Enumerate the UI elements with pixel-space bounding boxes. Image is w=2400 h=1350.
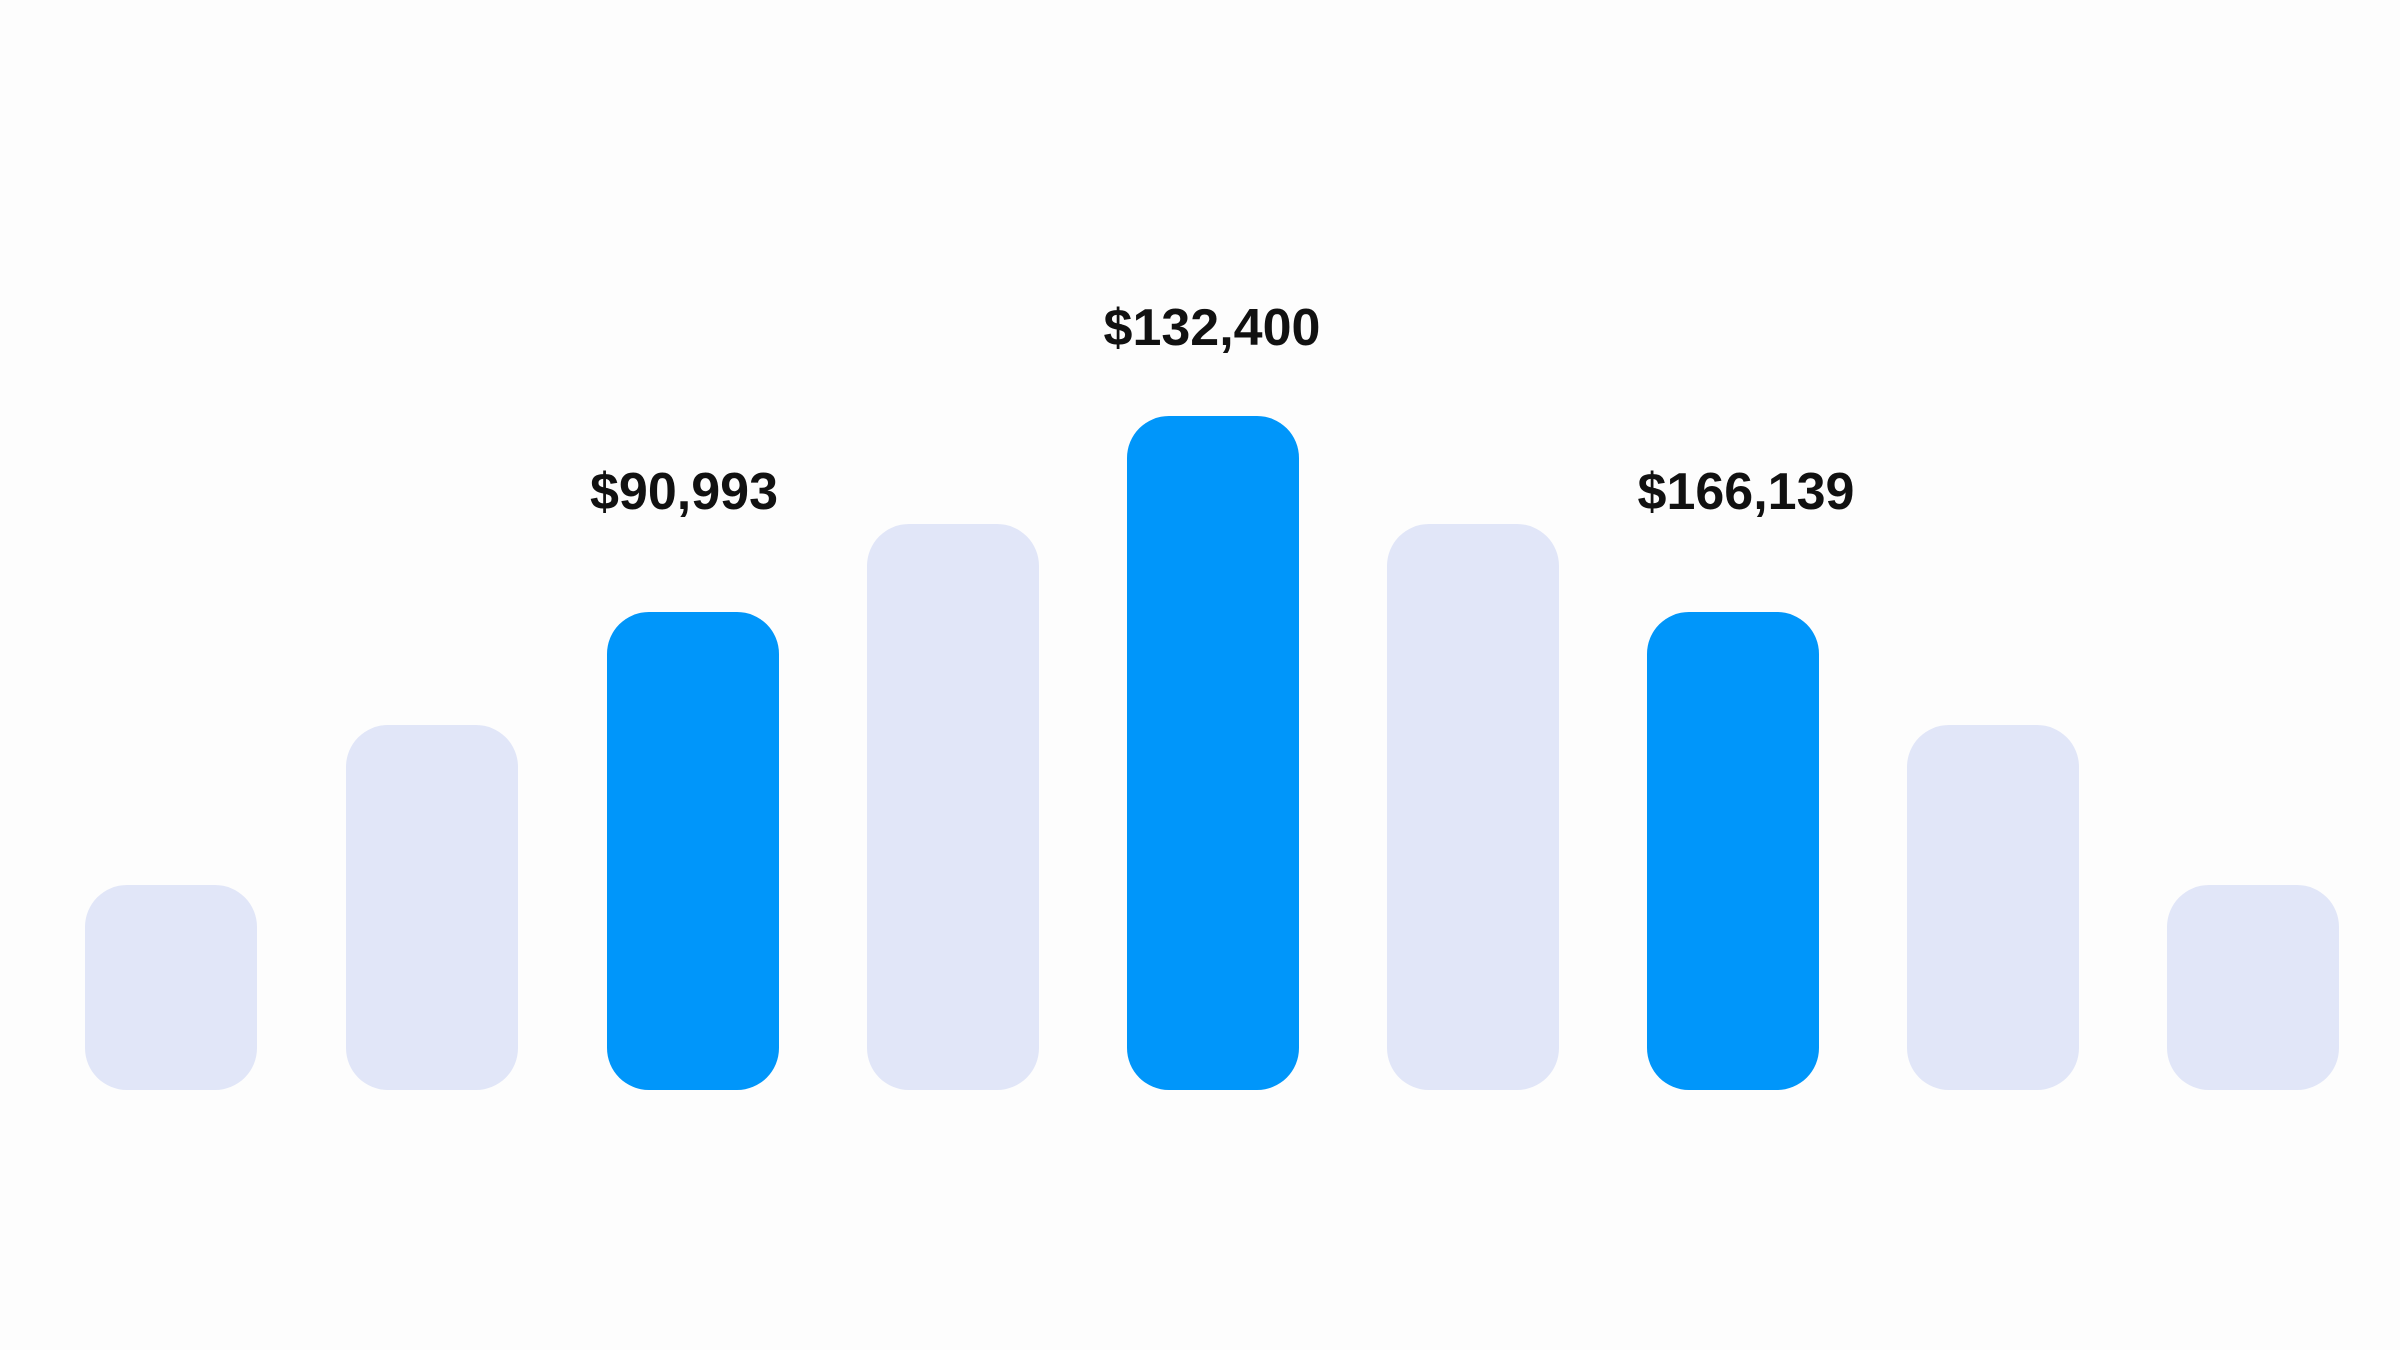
label: $166,139: $166,139 xyxy=(1638,463,1854,521)
bar 5 highlighted xyxy=(1127,416,1299,1090)
bar 8 xyxy=(1907,725,2079,1090)
bar 4 xyxy=(867,524,1039,1090)
bar 3 highlighted xyxy=(607,612,779,1090)
bar 2 xyxy=(346,725,518,1090)
bar 6 xyxy=(1387,524,1559,1090)
label: $132,400: $132,400 xyxy=(1104,299,1320,357)
bar 1 xyxy=(85,885,257,1090)
bar 7 highlighted xyxy=(1647,612,1819,1090)
bar 9 xyxy=(2167,885,2339,1090)
label: $90,993: $90,993 xyxy=(590,463,778,521)
